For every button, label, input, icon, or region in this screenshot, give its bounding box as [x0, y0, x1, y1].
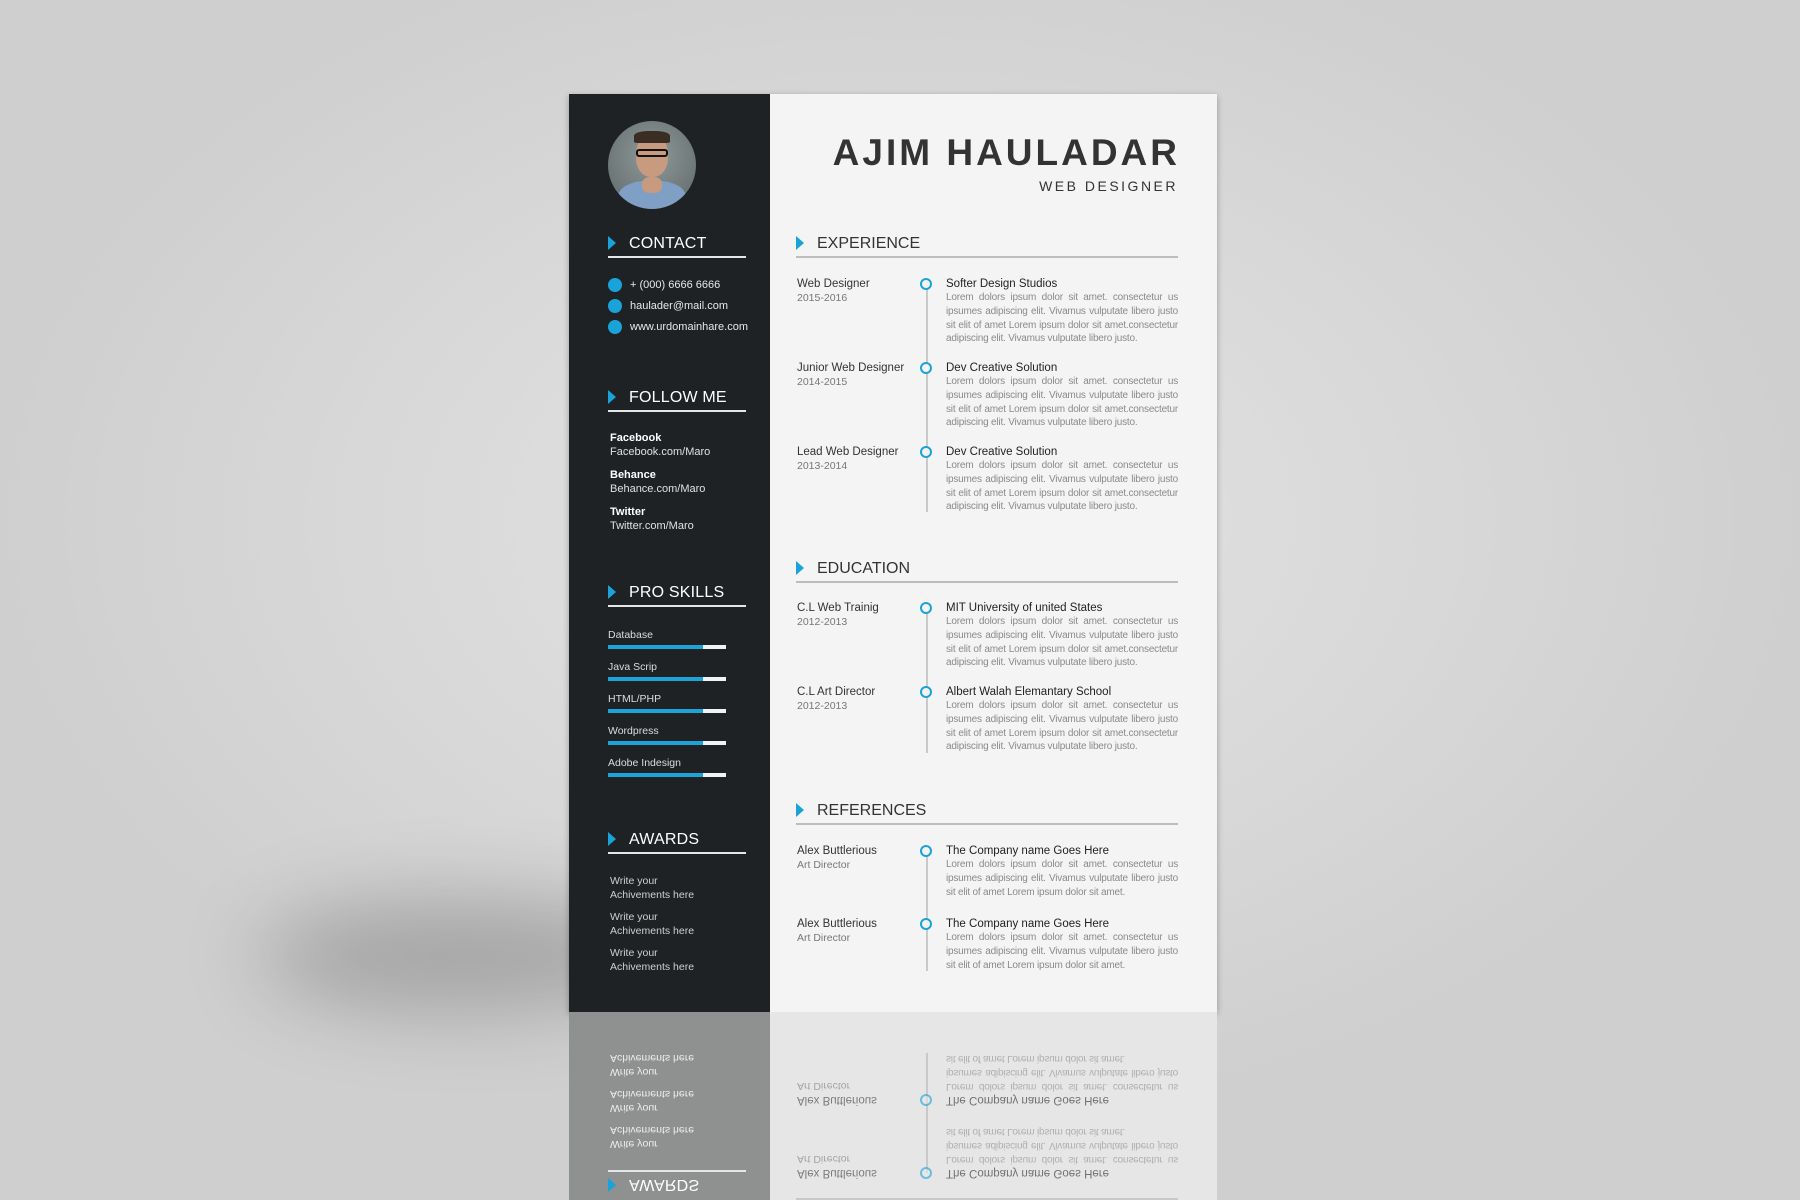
reference entries: Lorem dolors ipsum dolor sit amet. consectetur us ipsumes adipiscing elit. Vivamus vulputate libero justo sit elit of amet Lorem ipsum dolor sit amet. — [946, 932, 1178, 971]
awards list: Write your — [610, 875, 658, 887]
heading: follow me — [608, 389, 746, 412]
sidebar — [569, 94, 770, 1012]
skill bars: Adobe Indesign — [608, 757, 681, 769]
heading: references — [796, 802, 1178, 825]
skill bars: Database — [608, 629, 653, 641]
experience entries: Lead Web Designer — [797, 446, 898, 458]
education entries: Lorem dolors ipsum dolor sit amet. consectetur us ipsumes adipiscing elit. Vivamus vulputate libero justo sit elit of amet Lorem ipsum dolor sit amet.consectetur adipiscing elit. Vivamus vulputate libero justo. — [946, 616, 1178, 668]
experience entries: Dev Creative Solution — [946, 362, 1057, 374]
education entries: C.L Web Trainig — [797, 602, 879, 614]
heading: references: REFERENCES — [817, 802, 926, 819]
reflection: Achivements hereWrite your — [610, 1102, 694, 1136]
name title: AJIM HAULADAR — [833, 132, 1180, 173]
reference entries: The Company name Goes Here — [946, 918, 1109, 930]
education entries: Albert Walah Elemantary School — [946, 686, 1111, 698]
job subtitle: WEB DESIGNER — [1039, 178, 1178, 194]
contact list: + (000) 6666 6666 — [630, 279, 720, 291]
experience entries: Lorem dolors ipsum dolor sit amet. consectetur us ipsumes adipiscing elit. Vivamus vulputate libero justo sit elit of amet Lorem ipsum dolor sit amet.consectetur adipiscing elit. Vivamus vulputate libero justo. — [946, 376, 1178, 428]
resume paper — [569, 94, 1217, 1012]
reference entries: Art Director — [797, 932, 850, 944]
reference entries — [797, 845, 1178, 971]
heading: pro skills: PRO SKILLS — [629, 584, 724, 601]
social links: Facebook — [610, 432, 661, 444]
heading: awards: AWARDS — [629, 831, 699, 848]
reference entries: Lorem dolors ipsum dolor sit amet. consectetur us ipsumes adipiscing elit. Vivamus vulputate libero justo sit elit of amet Lorem ipsum dolor sit amet. — [946, 859, 1178, 898]
reflection: Alex Buttlerious — [797, 1167, 877, 1179]
reference entries: Alex Buttlerious — [797, 918, 877, 930]
social links: Facebook.com/Maro Behance — [610, 446, 710, 481]
awards list: Achivements here — [610, 961, 694, 973]
skill bars: Java Scrip — [608, 661, 657, 673]
reference entries: Alex Buttlerious — [797, 845, 877, 857]
social links: Behance.com/Maro Twitter — [610, 483, 705, 518]
heading: experience: EXPERIENCE — [817, 235, 920, 252]
education entries: Lorem dolors ipsum dolor sit amet. consectetur us ipsumes adipiscing elit. Vivamus vulputate libero justo sit elit of amet Lorem ipsum dolor sit amet.consectetur adipiscing elit. Vivamus vulputate libero justo. — [946, 700, 1178, 752]
heading: contact — [608, 235, 746, 258]
awards list — [610, 875, 694, 973]
awards list: Achivements here Write your — [610, 889, 694, 923]
reflection: The Company name Goes Here — [946, 1167, 1109, 1179]
experience entries: 2015-2016 — [797, 292, 847, 304]
social links: Twitter.com/Maro — [610, 520, 694, 532]
reflection: Write your — [610, 1138, 658, 1150]
social links — [610, 432, 710, 532]
skill bars — [608, 629, 726, 777]
reference entries: The Company name Goes Here — [946, 845, 1109, 857]
experience entries: 2013-2014 — [797, 460, 847, 472]
heading: pro skills — [608, 584, 746, 607]
skill bars: HTML/PHP — [608, 693, 661, 705]
heading: experience — [796, 235, 1178, 258]
experience entries: Web Designer — [797, 278, 870, 290]
heading: contact: CONTACT — [629, 235, 707, 252]
profile photo — [608, 121, 696, 209]
education entries — [797, 602, 1178, 752]
reflection: Art Director — [797, 1080, 850, 1092]
contact list: haulader@mail.com — [630, 300, 728, 312]
education entries: C.L Art Director — [797, 686, 875, 698]
floor shadow — [260, 900, 680, 1010]
heading: follow me: FOLLOW ME — [629, 389, 727, 406]
experience entries: 2014-2015 — [797, 376, 847, 388]
experience entries: Dev Creative Solution — [946, 446, 1057, 458]
heading: awards — [608, 831, 746, 854]
heading: education: EDUCATION — [817, 560, 910, 577]
contact list: www.urdomainhare.com — [630, 321, 748, 333]
experience entries: Lorem dolors ipsum dolor sit amet. consectetur us ipsumes adipiscing elit. Vivamus vulputate libero justo sit elit of amet Lorem ipsum dolor sit amet.consectetur adipiscing elit. Vivamus vulputate libero justo. — [946, 292, 1178, 344]
education entries: 2012-2013 — [797, 700, 847, 712]
awards list: Achivements here Write your — [610, 925, 694, 959]
reflection: The Company name Goes Here — [946, 1094, 1109, 1106]
experience entries — [797, 278, 1178, 512]
reflection: Lorem dolors ipsum dolor sit amet. consectetur us ipsumes adipiscing elit. Vivamus vulputate libero justo sit elit of amet Lorem ipsum dolor sit amet. — [946, 1053, 1178, 1092]
experience entries: Junior Web Designer — [797, 362, 904, 374]
reference entries: Art Director — [797, 859, 850, 871]
contact list — [608, 278, 748, 334]
reflection — [569, 1012, 1217, 1200]
reflection: Lorem dolors ipsum dolor sit amet. consectetur us ipsumes adipiscing elit. Vivamus vulputate libero justo sit elit of amet Lorem ipsum dolor sit amet. — [946, 1126, 1178, 1165]
skill bars: Wordpress — [608, 725, 659, 737]
education entries: 2012-2013 — [797, 616, 847, 628]
reflection: Alex Buttlerious — [797, 1094, 877, 1106]
reflection: Achivements hereWrite your — [610, 1066, 694, 1100]
reflection: AWARDS — [629, 1176, 699, 1193]
experience entries: Softer Design Studios — [946, 278, 1057, 290]
reflection: Art Director — [797, 1153, 850, 1165]
heading: education — [796, 560, 1178, 583]
experience entries: Lorem dolors ipsum dolor sit amet. consectetur us ipsumes adipiscing elit. Vivamus vulputate libero justo sit elit of amet Lorem ipsum dolor sit amet.consectetur adipiscing elit. Vivamus vulputate libero justo. — [946, 460, 1178, 512]
reflection: Achivements here — [610, 1052, 694, 1064]
education entries: MIT University of united States — [946, 602, 1102, 614]
